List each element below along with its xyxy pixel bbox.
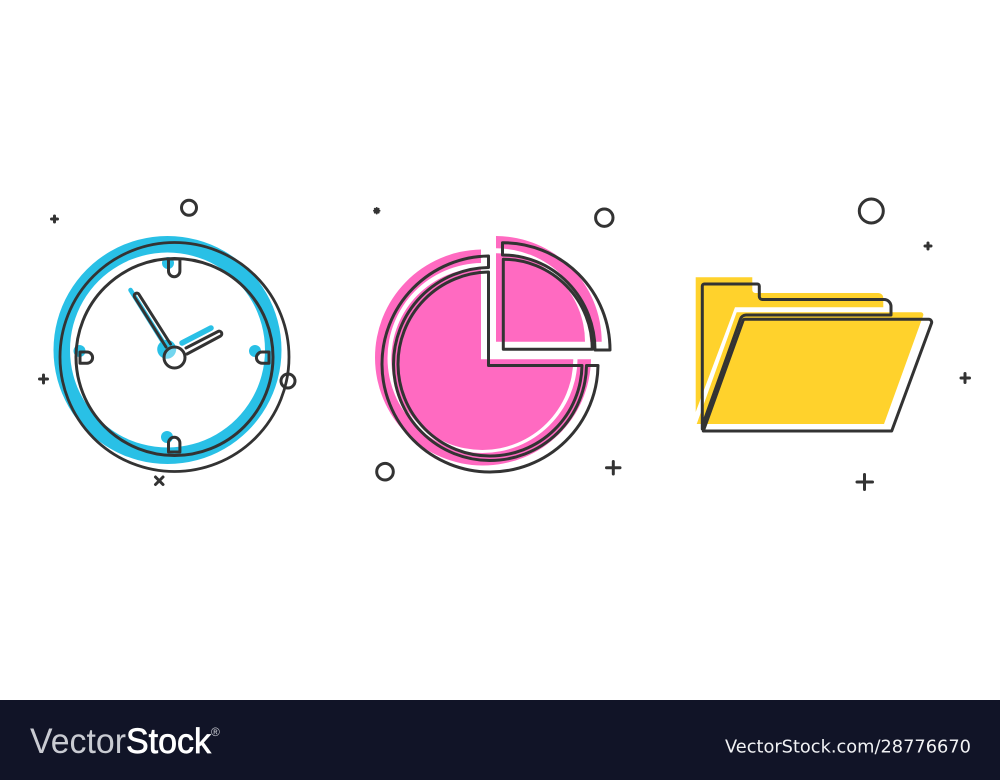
footer logo: Vector xyxy=(30,722,126,761)
icon: folder xyxy=(696,277,932,431)
footer bar: Stock xyxy=(126,722,211,761)
folder outline xyxy=(702,284,932,431)
pie colour fill xyxy=(375,236,602,465)
clock outline xyxy=(60,242,289,472)
pie decorations xyxy=(374,208,620,480)
clock colour fill xyxy=(54,236,282,464)
folder colour fill xyxy=(696,277,923,424)
clock decorations xyxy=(40,200,295,484)
icon: pie chart xyxy=(375,236,610,472)
footer bar: ® xyxy=(211,725,220,739)
footer image id: VectorStock.com/28776670 xyxy=(725,736,971,758)
icon: clock xyxy=(54,236,289,472)
footer bar xyxy=(0,700,1000,780)
pie outline xyxy=(382,243,610,472)
folder decorations xyxy=(857,199,970,490)
